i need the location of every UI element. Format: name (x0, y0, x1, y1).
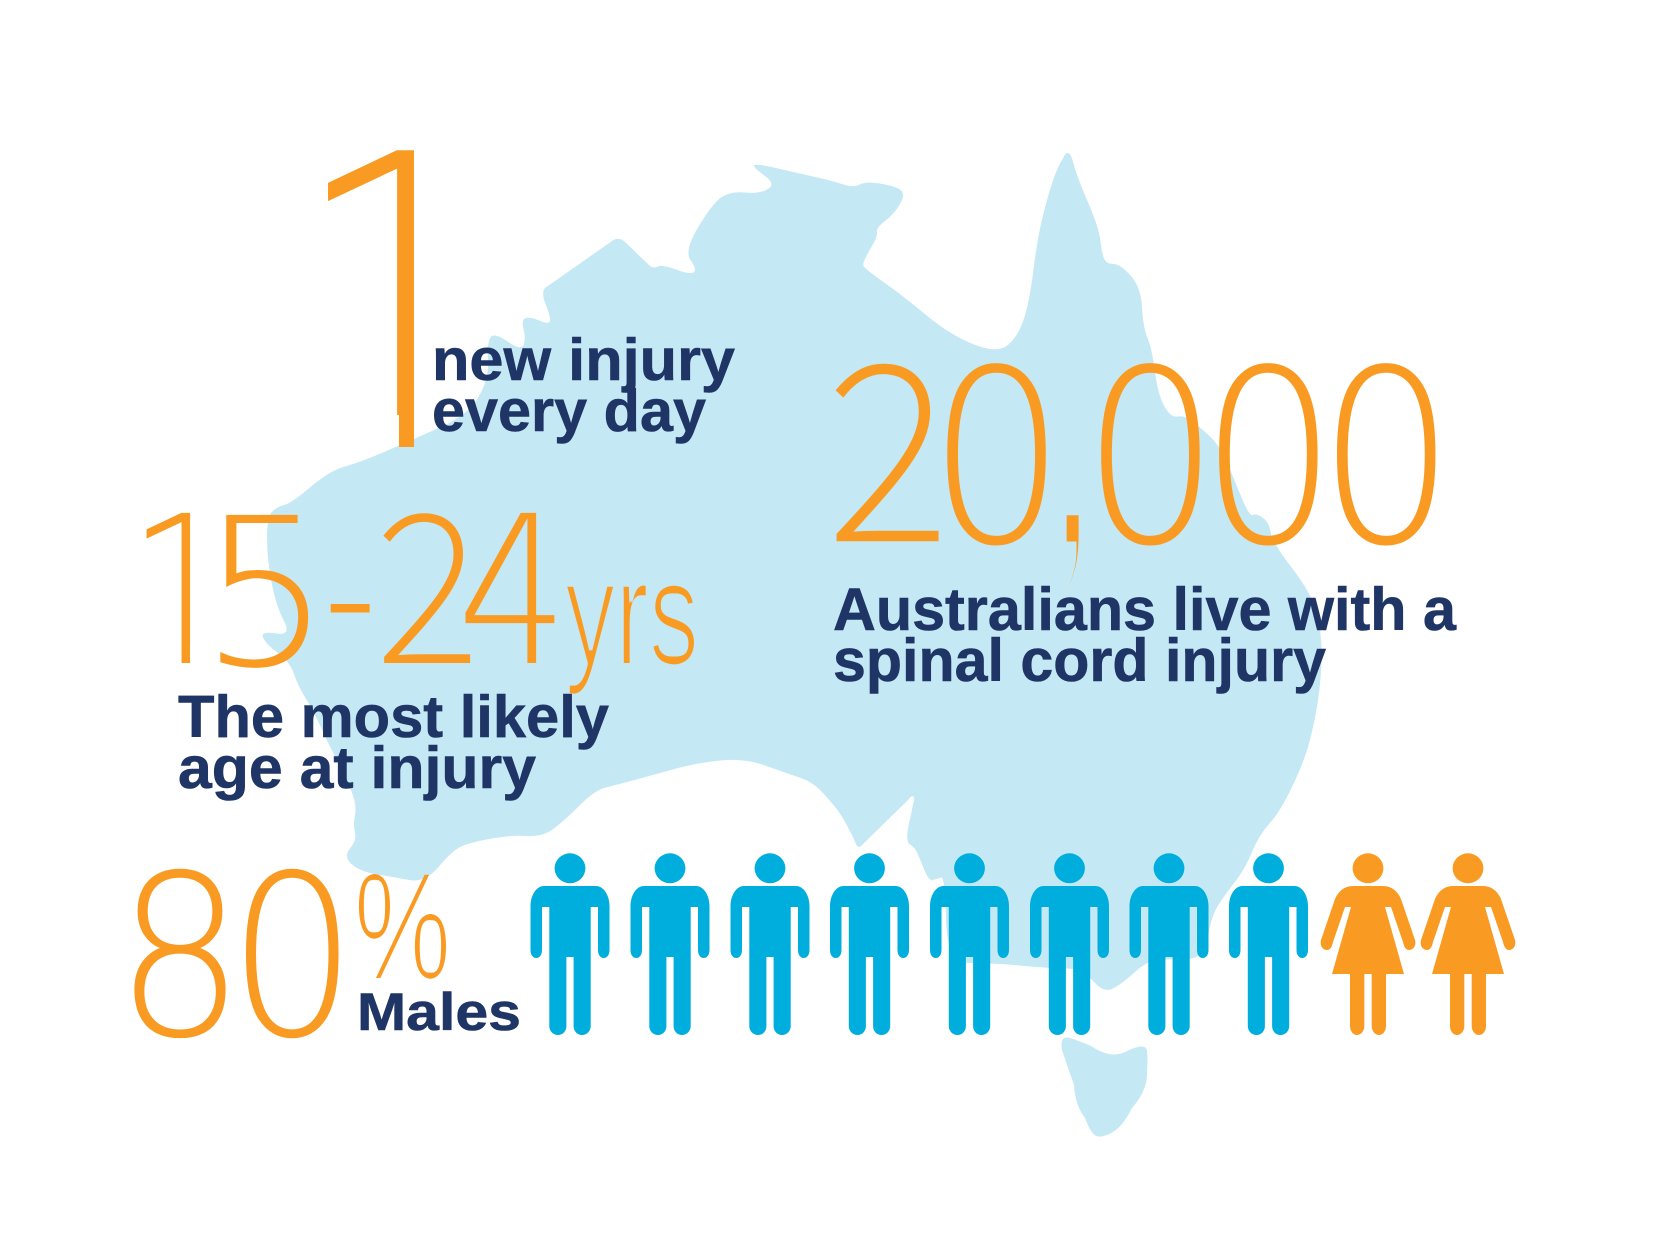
label: Males: Males (357, 983, 521, 1042)
male icon 3 (730, 853, 810, 1035)
digit 2 of 20,000: 2 (827, 257, 949, 610)
male icon 1 (530, 853, 610, 1035)
label: the most likely age at injury (178, 684, 609, 801)
female icon 1 (1321, 853, 1415, 1035)
infographic canvas (134, 150, 1516, 1137)
label: the most likely age at injury: The most likely (178, 684, 609, 750)
map of Australia (263, 153, 1322, 1137)
label: new injury every day: new injury (432, 327, 735, 393)
male icon 6 (1030, 853, 1109, 1035)
female icon 2 (1421, 853, 1515, 1035)
pictogram: two females in ten (1321, 853, 1515, 1035)
big number 80: 80 (115, 827, 357, 1088)
stat: 20,000 (827, 248, 1457, 694)
stat: 15-24 yrs (146, 512, 694, 801)
label: the most likely age at injury: age at injury (178, 735, 536, 801)
stat: 80% males (115, 827, 521, 1088)
label: Australians live with a spinal cord injury: Australians live with a (833, 576, 1457, 643)
label: new injury every day: every day (432, 378, 706, 444)
label: Australians live with a spinal cord injury (833, 576, 1457, 694)
digits 000: 000 (1082, 319, 1456, 600)
pictogram: eight males in ten (530, 853, 1308, 1035)
male icon 2 (630, 853, 710, 1035)
mainland (263, 153, 1322, 990)
digit 5 of 15: 5 (200, 474, 331, 714)
label: new injury every day (432, 327, 735, 444)
digit 1 of 15: 1 (127, 473, 239, 713)
comma: , (1040, 248, 1104, 617)
digit 2 of 24: 2 (376, 424, 479, 722)
big number 1: 1 (290, 70, 510, 544)
male icon 8 (1229, 853, 1308, 1035)
unit yrs: yrs (565, 530, 699, 696)
Tasmania (1062, 1037, 1148, 1137)
digit 0 of 20: 0 (928, 319, 1066, 600)
label: Australians live with a spinal cord injury: spinal cord injury (833, 627, 1327, 694)
male icon 4 (830, 853, 909, 1035)
male icon 5 (930, 853, 1009, 1035)
hyphen: - (317, 465, 384, 717)
stat: 1 new injury every day (290, 70, 735, 544)
percent sign: % (354, 841, 451, 1012)
male icon 7 (1130, 853, 1208, 1035)
digit 4 of 24: 4 (457, 473, 568, 713)
